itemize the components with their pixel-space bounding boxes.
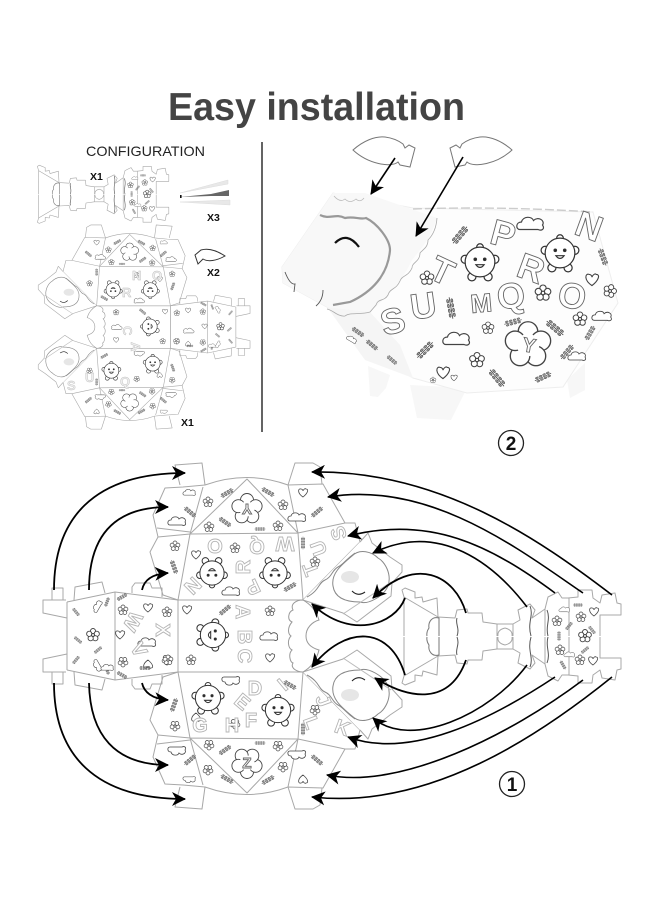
part: ears <box>195 249 225 279</box>
part: main body net <box>38 225 250 429</box>
body net letters: H <box>225 715 239 737</box>
sheep legs <box>368 363 585 420</box>
arrows: left side connections <box>54 473 185 799</box>
body net letters: Y <box>242 500 252 517</box>
body net letters: C <box>233 649 255 663</box>
sheep body <box>282 193 618 393</box>
step number 2: 2 <box>506 434 516 455</box>
body net letters: W <box>275 532 294 554</box>
arrow: right ear to neck <box>416 157 463 236</box>
step number 1: 1 <box>507 775 518 796</box>
body net letters: I <box>274 675 292 696</box>
body net letters: K <box>331 716 353 741</box>
step number 2 <box>498 430 524 456</box>
body net letters: W <box>118 607 146 635</box>
title: Easy installation <box>168 86 465 129</box>
part: body legs and neck sheet <box>37 165 169 223</box>
part: main body net: Q <box>120 374 130 389</box>
main body net <box>43 463 402 809</box>
body net letters: D <box>248 678 262 700</box>
sheep top seam <box>413 208 593 212</box>
body net letters: O <box>207 534 223 556</box>
body net letters: N <box>179 572 205 598</box>
body net letters <box>118 500 353 772</box>
part: main body net: S <box>67 378 76 393</box>
sheep characters <box>461 235 579 281</box>
part: main body net: U <box>85 370 94 385</box>
sheep body letters: T <box>424 247 461 294</box>
part: main body net: R <box>122 285 132 300</box>
sheep body letters: S <box>376 298 410 344</box>
body net letters: B <box>233 630 255 644</box>
ear right <box>450 137 512 167</box>
body net letters: L <box>298 713 323 732</box>
body net letters: V <box>125 639 151 662</box>
part: marker pens <box>180 180 230 224</box>
part: ears: X2 <box>207 267 220 279</box>
sheep body letters: N <box>570 203 609 250</box>
sheep chest panel <box>327 307 413 378</box>
sheep body letters: P <box>486 211 520 257</box>
body net letters: S <box>327 523 352 543</box>
part: marker pens: X3 <box>207 212 220 224</box>
body net letters: U <box>307 537 332 559</box>
body net letters: Q <box>249 535 265 557</box>
sheep body letters <box>376 203 609 344</box>
big flower with Y <box>505 322 551 366</box>
sheep flowers, leaves, clouds and hearts <box>415 217 616 388</box>
step number 1 <box>500 772 524 796</box>
body net letters: F <box>245 710 257 732</box>
body net letters: E <box>230 690 254 715</box>
body net letters: X <box>151 623 173 637</box>
part: main body net: O <box>152 268 162 283</box>
part: body legs and neck sheet: X1 <box>90 171 103 183</box>
divider between configuration and assembled sheep <box>261 142 263 432</box>
ear left <box>353 137 415 167</box>
big flower with Y: Y <box>521 334 538 358</box>
body net letters: P <box>242 574 263 599</box>
arrow: left ear to head <box>371 158 395 194</box>
heading: configuration: CONFIGURATION <box>86 143 205 159</box>
part: main body net: X1 <box>181 417 194 429</box>
sheep body letters: O <box>555 273 590 318</box>
sheep body letters: Q <box>493 273 528 318</box>
part: main body net: N <box>132 268 141 283</box>
sheep body letters: U <box>408 284 439 328</box>
arrows: right side connections <box>312 472 612 798</box>
panel: assembled sheep <box>282 137 618 456</box>
panel: assembly net <box>43 463 621 809</box>
body net letters: Z <box>242 755 252 772</box>
part: main body net: A <box>128 342 143 352</box>
sheep body letters: R <box>512 245 551 292</box>
sheep body letters: M <box>469 287 493 319</box>
body net letters: J <box>310 692 335 710</box>
body net letters: A <box>231 605 253 619</box>
body net letters: G <box>192 715 208 737</box>
neck and legs net <box>402 588 621 685</box>
part: main body net: C <box>120 326 135 336</box>
body net letters: T <box>299 560 324 579</box>
panel: configuration <box>37 143 250 429</box>
sheep head <box>282 193 437 316</box>
body net letters: R <box>233 559 255 574</box>
